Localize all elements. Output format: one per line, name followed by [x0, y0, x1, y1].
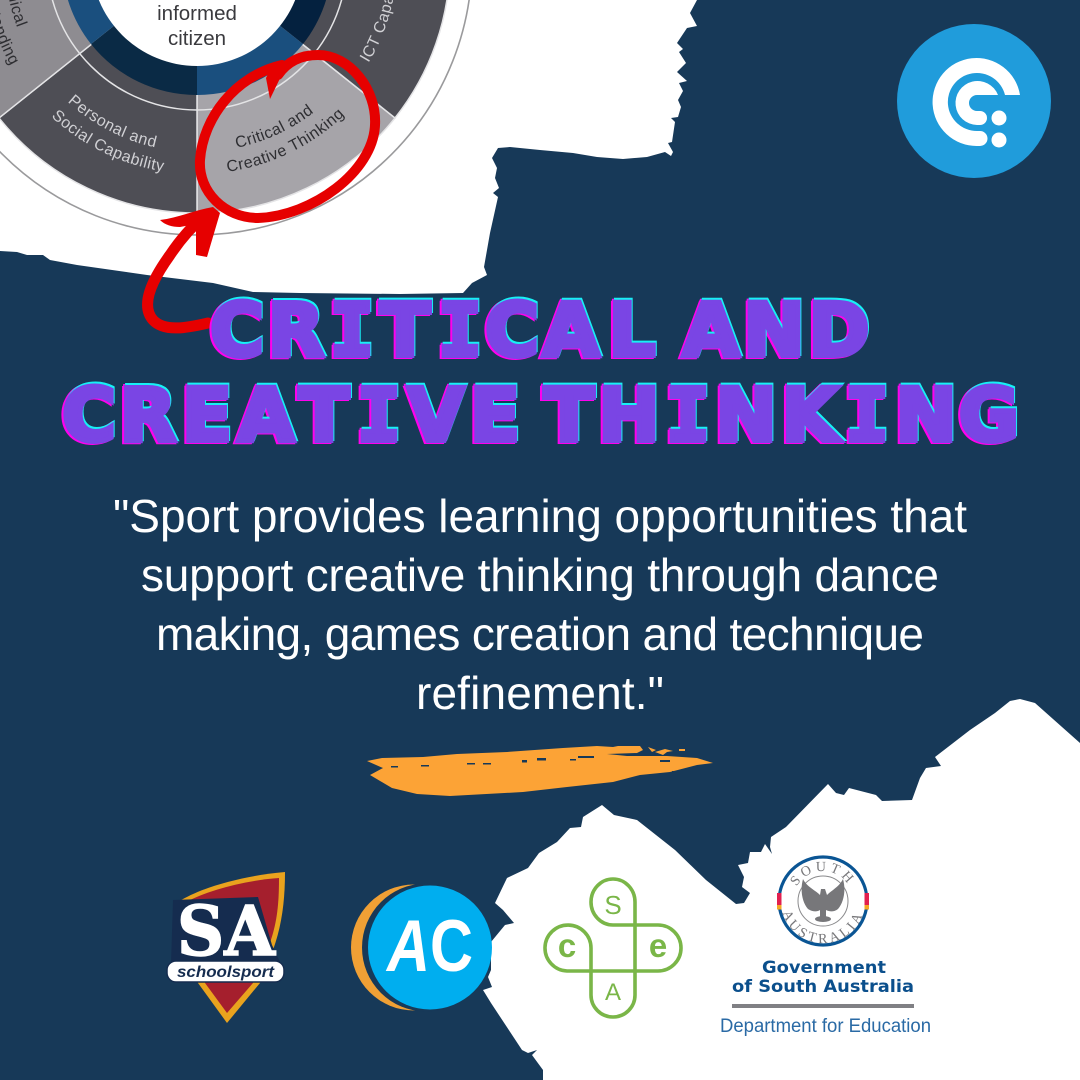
red hand-drawn circle — [200, 55, 375, 218]
inner white ring — [47, 0, 347, 110]
quote line 2: support creative thinking through dance — [141, 549, 939, 601]
logo: Government of South Australia: of South Australia — [732, 977, 914, 996]
segment label: Social Capability: Social Capability — [52, 110, 164, 174]
quote line 1: "Sport provides learning opportunities that — [113, 490, 967, 542]
logo: SACE: S — [604, 890, 622, 920]
segment label: Personal and: Personal and — [68, 94, 157, 148]
wheel outer rim — [0, 0, 472, 235]
red curved arrow — [148, 207, 220, 328]
state seal: SOUTH — [790, 862, 854, 886]
curriculum wheel diagram — [0, 0, 470, 236]
logo: SA schoolsport — [167, 872, 285, 1023]
government name: Government — [762, 958, 886, 977]
state seal — [777, 855, 869, 947]
white centre circle — [91, 0, 303, 66]
quote line 4: refinement." — [416, 667, 664, 719]
torn white panel: top left — [0, 0, 697, 294]
centre label: informed — [157, 2, 237, 25]
logo: SACE: c — [558, 927, 576, 964]
logo: SACE — [545, 879, 681, 1017]
quote text — [113, 490, 967, 719]
segment label: Critical and: Critical and — [236, 104, 313, 147]
department: Department for Education — [720, 1016, 931, 1037]
SA letters: SA — [177, 892, 276, 972]
quote line 3: making, games creation and technique — [156, 608, 924, 660]
logo: SACE: A — [605, 979, 621, 1006]
blue ring sectors — [197, 0, 303, 95]
shield — [178, 872, 285, 1023]
title line 2: CREATIVE THINKING — [62, 374, 1019, 458]
orange brush stroke — [367, 746, 713, 796]
torn white panel: bottom right — [483, 699, 1080, 1080]
wheel segments — [0, 0, 450, 213]
schoolsport pill — [167, 961, 284, 982]
logo: CG circle — [897, 24, 1051, 178]
logo: SACE: e — [649, 927, 667, 964]
logo: AC — [351, 884, 492, 1012]
rule — [732, 1004, 914, 1008]
logo: Government of South Australia — [720, 855, 931, 1037]
state seal: AUSTRALIA — [782, 912, 862, 944]
logo: AC: AC — [385, 906, 473, 987]
title — [62, 288, 1019, 458]
schoolsport wordmark: schoolsport — [177, 964, 275, 981]
title line 1: CRITICAL AND — [210, 288, 869, 374]
centre label: citizen — [168, 27, 226, 50]
segment label: Creative Thinking: Creative Thinking — [227, 110, 345, 172]
